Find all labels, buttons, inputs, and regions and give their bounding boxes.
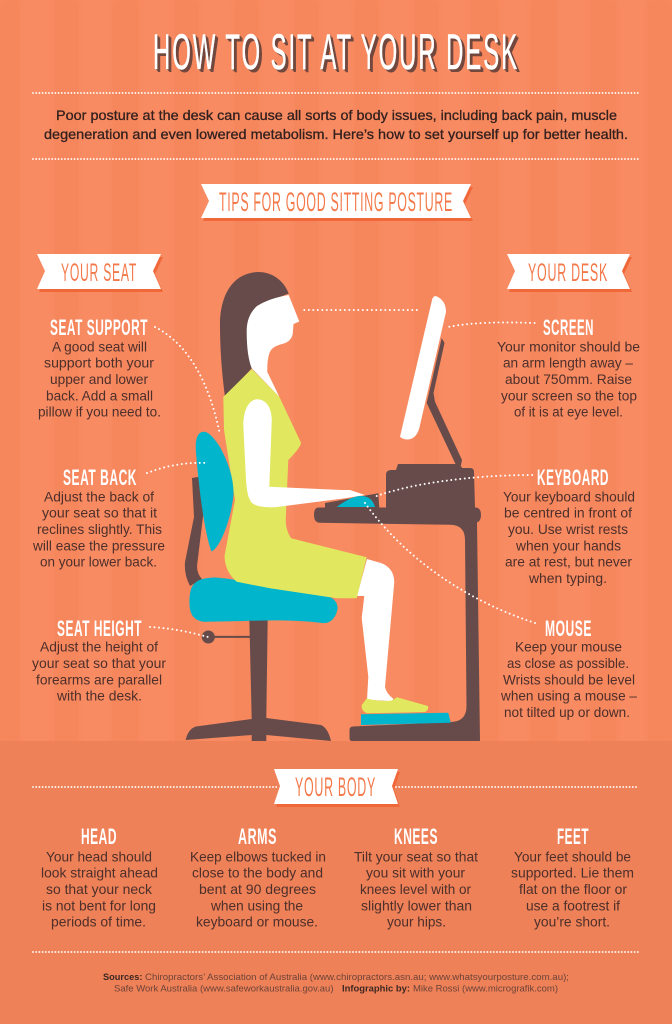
monitor stand — [427, 338, 462, 465]
tip: keyboard: be centred in front of — [504, 504, 632, 520]
tip: mouse: Wrists should be level — [503, 671, 635, 687]
tip: screen: Your monitor should be — [497, 338, 640, 354]
tip: knees — [354, 824, 478, 929]
tip: knees: you sit with your — [366, 864, 465, 880]
leg — [357, 559, 394, 701]
tip: arms: keyboard or mouse. — [196, 913, 318, 929]
sources and credits: Sources: — [103, 972, 142, 983]
mouse — [337, 496, 375, 507]
monitor base — [386, 464, 475, 508]
arm — [243, 399, 365, 507]
tip: feet: use a footrest if — [526, 897, 620, 913]
tip: seat back: on your lower back. — [40, 553, 157, 569]
tip: screen: an arm length away – — [503, 354, 633, 370]
tip: seat support: back. Add a small — [46, 387, 153, 403]
chair pole and base — [186, 618, 331, 741]
tip: keyboard — [503, 465, 635, 586]
tip: screen: SCREEN — [543, 315, 594, 340]
tip: seat back: reclines slightly. This — [37, 521, 162, 537]
banner: your seat — [37, 254, 163, 292]
tip: arms: bent at 90 degrees — [199, 881, 316, 897]
banner: your body: YOUR BODY — [295, 772, 376, 802]
dress — [223, 369, 367, 598]
tip: knees: Tilt your seat so that — [354, 848, 478, 864]
leader: seat height — [150, 627, 208, 637]
tip: seat back: your seat so that it — [42, 505, 157, 521]
tip: mouse: MOUSE — [545, 616, 592, 641]
back cushion — [196, 432, 234, 552]
sources and credits: Mike Rossi (www.micrografik.com) — [413, 984, 558, 994]
tip: screen: your screen so the top — [501, 387, 637, 403]
tip: head: HEAD — [81, 824, 117, 849]
tip: screen — [497, 315, 640, 419]
tip: seat support: A good seat will — [52, 338, 147, 354]
tip: mouse: Keep your mouse — [515, 638, 622, 654]
illustration: desk, monitor and seated woman — [185, 272, 481, 741]
sources and credits: Infographic by: — [342, 984, 410, 994]
tip: screen: of it is at eye level. — [514, 403, 623, 419]
tip: keyboard: KEYBOARD — [537, 465, 609, 490]
tip: seat support: upper and lower — [50, 371, 148, 387]
tip: arms — [190, 824, 326, 929]
tip: arms: ARMS — [238, 824, 277, 849]
tip: head: so that your neck — [46, 881, 153, 897]
banner: your seat: YOUR SEAT — [61, 259, 137, 287]
intro text — [44, 107, 628, 142]
tip: seat back — [32, 465, 165, 569]
tip: knees: your hips. — [387, 913, 446, 929]
tip: knees: KNEES — [394, 824, 438, 849]
desk — [314, 508, 481, 741]
leader: seat support — [155, 327, 220, 435]
intro text: Poor posture at the desk can cause all sorts of body issues, including back pain, muscle — [56, 107, 617, 123]
seat cushion — [189, 578, 338, 623]
tip: head — [41, 824, 158, 929]
tip: mouse: not tilted up or down. — [504, 704, 630, 720]
tip: mouse — [500, 616, 637, 720]
tip: seat height: forearms are parallel — [36, 671, 162, 687]
sources and credits — [103, 972, 569, 994]
keyboard — [325, 493, 379, 508]
sources and credits: Chiropractors’ Association of Australia (www.chiropractors.asn.au; www.whatsyourposture.com.au); — [145, 972, 569, 983]
leader: seat back — [147, 463, 207, 473]
tip: head: look straight ahead — [41, 864, 158, 880]
tip: keyboard: when your hands — [515, 537, 621, 553]
tip: feet: supported. Lie them — [511, 864, 634, 880]
face and neck — [247, 295, 299, 397]
tip: seat height: SEAT HEIGHT — [57, 616, 142, 641]
tip: arms: when using the — [210, 897, 303, 913]
leader: head to monitor — [304, 309, 419, 311]
banner: your desk — [507, 254, 632, 292]
tip: keyboard: Your keyboard should — [503, 488, 635, 504]
tip: seat support: SEAT SUPPORT — [50, 315, 148, 340]
tip: head: Your head should — [46, 848, 152, 864]
tip: feet: flat on the floor or — [519, 881, 627, 897]
monitor screen — [400, 296, 446, 440]
tip: arms: Keep elbows tucked in — [190, 848, 326, 864]
tip: seat back: Adjust the back of — [44, 488, 154, 504]
tip: feet — [511, 824, 634, 929]
tip: seat support — [38, 315, 161, 419]
tip: mouse: as close as possible. — [507, 655, 629, 671]
footrest — [361, 713, 451, 725]
tip: arms: close to the body and — [192, 864, 323, 880]
tip: keyboard: are at rest, but never — [505, 553, 632, 569]
leader: screen — [449, 322, 535, 327]
banner: your body — [274, 769, 400, 807]
shoe — [362, 697, 428, 713]
tip: feet: Your feet should be — [514, 848, 631, 864]
tip: head: periods of time. — [51, 913, 146, 929]
tip: seat height: with the desk. — [56, 687, 142, 703]
sources and credits: Safe Work Australia (www.safeworkaustralia.gov.au) — [114, 984, 334, 994]
tip: head: is not bent for long — [42, 897, 156, 913]
tip: screen: about 750mm. Raise — [505, 371, 632, 387]
tip: seat support: support both your — [44, 354, 154, 370]
leader: mouse — [365, 503, 535, 623]
tip: seat back: SEAT BACK — [63, 465, 137, 490]
seat height lever — [208, 636, 250, 638]
tip: seat back: will ease the pressure — [32, 537, 165, 553]
chair back frame — [185, 476, 205, 586]
tip: keyboard: you. Use wrist rests — [508, 521, 628, 537]
tip: seat height: your seat so that your — [32, 655, 166, 671]
tip: feet: FEET — [557, 824, 589, 849]
tip: knees: slightly lower than — [361, 897, 472, 913]
tip: mouse: when using a mouse – — [500, 687, 637, 703]
tip: feet: you’re short. — [534, 913, 610, 929]
hair — [220, 272, 289, 397]
tip: seat height: Adjust the height of — [40, 638, 158, 654]
tip: knees: knees level with or — [360, 881, 471, 897]
intro text: degeneration and even lowered metabolism. Here’s how to set yourself up for better health. — [44, 126, 628, 142]
tip: seat support: pillow if you need to. — [38, 403, 161, 419]
title — [153, 24, 522, 83]
tip: seat height — [32, 616, 166, 703]
leader: keyboard — [377, 475, 533, 496]
banner: tips for good sitting posture — [201, 184, 473, 221]
tip: keyboard: when typing. — [528, 570, 607, 586]
